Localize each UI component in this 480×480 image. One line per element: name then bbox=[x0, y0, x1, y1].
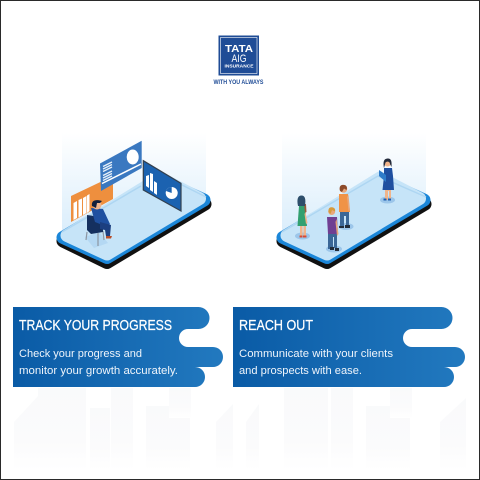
description: Check your progress and bbox=[19, 348, 142, 360]
description bbox=[19, 348, 178, 377]
illustration: person viewing dashboards on phone bbox=[62, 133, 206, 262]
man in orange shirt bbox=[339, 185, 350, 228]
logo: Tata AIG Insurance bbox=[214, 36, 264, 86]
seated person bbox=[85, 200, 112, 248]
logo: Tata AIG Insurance: WITH YOU ALWAYS bbox=[214, 79, 264, 86]
logo: Tata AIG Insurance: INSURANCE bbox=[224, 64, 254, 68]
description: monitor your growth accurately. bbox=[19, 365, 178, 377]
phone body bbox=[62, 133, 206, 262]
heading: TRACK YOUR PROGRESS bbox=[19, 318, 172, 334]
dark blue analytics panel bbox=[143, 161, 181, 211]
panel: reach out bbox=[233, 307, 465, 387]
phone body bbox=[282, 133, 426, 262]
logo: Tata AIG Insurance: AIG bbox=[232, 53, 246, 65]
blue document panel bbox=[100, 141, 142, 191]
description: and prospects with ease. bbox=[239, 365, 362, 377]
panel: track your progress bbox=[13, 307, 223, 387]
logo: Tata AIG Insurance: TATA bbox=[225, 44, 253, 55]
orange chart panel bbox=[71, 176, 113, 222]
background: faint city skyline bbox=[14, 388, 466, 470]
description: Communicate with your clients bbox=[239, 348, 394, 360]
heading: REACH OUT bbox=[239, 318, 313, 334]
illustration: people networking on phone bbox=[282, 133, 426, 262]
woman in green dress bbox=[297, 196, 308, 238]
man in purple shirt bbox=[327, 207, 339, 251]
woman presenting with book bbox=[379, 158, 394, 200]
floor shadows bbox=[295, 196, 395, 252]
description bbox=[239, 348, 394, 377]
